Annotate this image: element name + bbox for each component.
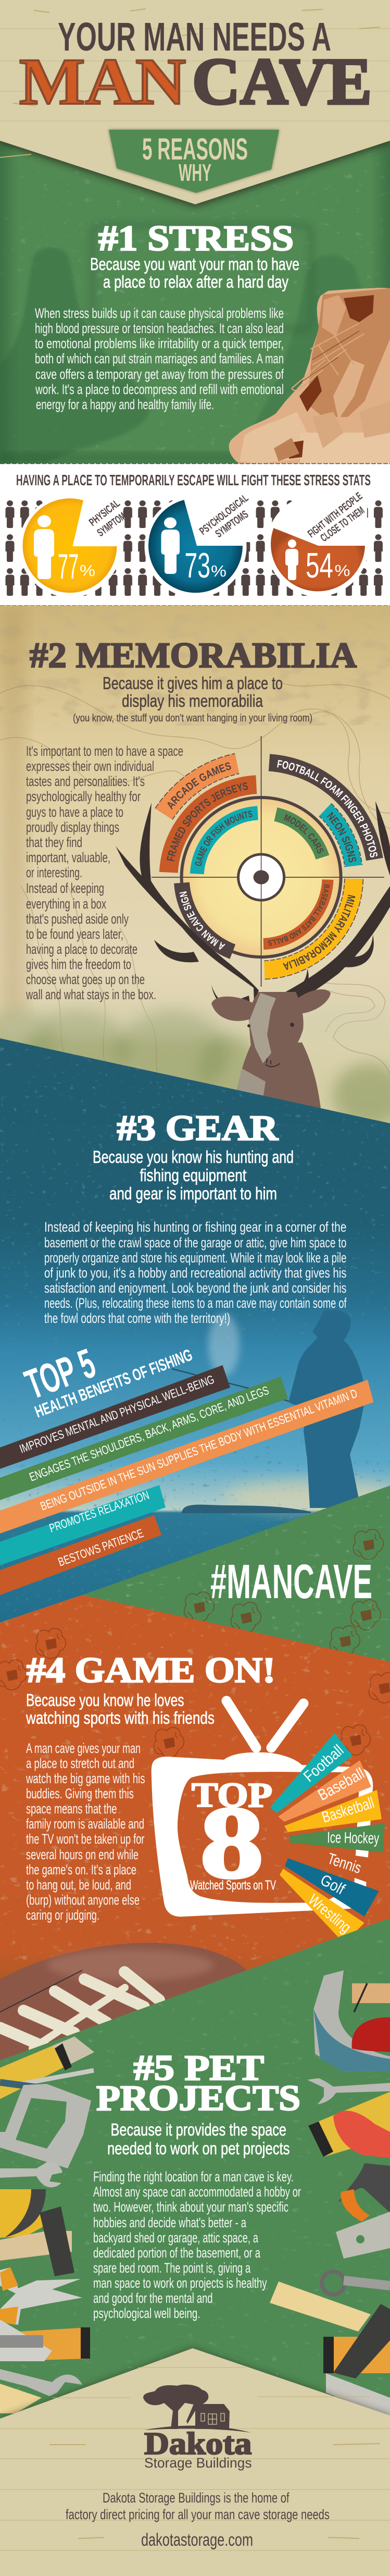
text block: pet projects body: and good for the mental and xyxy=(93,2290,212,2306)
subheading: stress reason: a place to relax after a hard day xyxy=(103,272,288,291)
heading: top 8: 8 xyxy=(200,1785,263,1899)
text block: game on body xyxy=(26,1740,145,1923)
icon: tv outline and antennas xyxy=(152,1701,373,1917)
deer neck xyxy=(237,1042,321,1108)
chart: top 8 watched sports tv xyxy=(152,1701,385,1943)
panel: stress stats band xyxy=(0,463,390,606)
heading: top 8 xyxy=(190,1776,276,1899)
panel: cream header with chevron xyxy=(0,0,390,207)
text block: pet projects body xyxy=(93,2169,301,2321)
subheading: gear reason: fishing equipment xyxy=(140,1166,246,1185)
icon: deer mount with antlers xyxy=(116,801,390,1108)
band: bestows patience: BESTOWS PATIENCE xyxy=(56,1526,145,1569)
arc: arcade games xyxy=(155,753,240,820)
subheading: memorabilia reason: display his memorabilia xyxy=(122,691,263,710)
text block: stress body: high blood pressure or tension headaches. It can also lead xyxy=(35,321,284,336)
text block: stress body xyxy=(35,305,284,412)
text block: pet projects body: psychological well being. xyxy=(93,2305,200,2321)
chart: 77 percent physical symptoms: PHYSICAL xyxy=(87,497,122,529)
ray: wrestling xyxy=(280,1869,364,1943)
chart: 77 percent physical symptoms: 77 xyxy=(58,547,79,586)
text block: stress body: energy for a happy and healthy family life. xyxy=(36,397,214,412)
ray: baseball xyxy=(278,1760,371,1822)
ray: tennis xyxy=(286,1846,385,1886)
text block: pet projects body: two. However, think about your man's specific xyxy=(93,2199,288,2215)
heading: #5 pet projects xyxy=(96,2048,300,2118)
text block: pet projects body: backyard shed or garage, attic space, a xyxy=(93,2230,259,2246)
icon: football xyxy=(0,1943,247,2060)
deer ears xyxy=(211,997,254,1021)
text block: game on body: a place to stretch out and xyxy=(26,1756,134,1771)
text block: game on body: (burp) without anyone else xyxy=(26,1892,140,1908)
panel: gear section sky and water xyxy=(0,1037,390,1663)
arc: model cars: MODEL CARS xyxy=(283,814,324,854)
text block: memorabilia body: psychologically healthy for xyxy=(26,789,141,804)
arc: arcade games: ARCADE GAMES xyxy=(168,762,231,810)
text block: memorabilia body: wall and what stays in the box. xyxy=(26,987,156,1002)
tool: level and saw lower left xyxy=(0,2320,90,2361)
chart: target of memorabilia items xyxy=(152,736,384,987)
heading: top 8: TOP xyxy=(192,1776,272,1814)
ray: golf: Golf xyxy=(318,1871,348,1898)
text block: memorabilia body: important, valuable, xyxy=(26,850,110,865)
tool: wrench and ruler bottom left xyxy=(0,2369,82,2413)
arc: football foam finger photos: FOOTBALL FOAM FINGER PHOTOS xyxy=(277,760,378,857)
text block: pet projects body: Finding the right location for a man cave is key. xyxy=(93,2169,294,2185)
text block: pet projects body: spare bed room. The point is, giving a xyxy=(93,2260,251,2276)
tool: ruler right xyxy=(270,2281,371,2332)
tool: drill and saw right xyxy=(336,2163,390,2259)
arc: model cars xyxy=(274,807,329,860)
ray: baseball: Baseball xyxy=(315,1765,367,1804)
subheading: gear reason: and gear is important to him xyxy=(109,1184,277,1203)
text block: game on body: A man cave gives your man xyxy=(26,1740,141,1756)
text block: memorabilia body: gives him the freedom to xyxy=(26,956,131,972)
chart: 73 percent psychological symptoms: PSYCHOLOGICAL xyxy=(197,492,250,537)
ray: tennis: Tennis xyxy=(325,1850,363,1877)
tool: level upper left xyxy=(0,2037,94,2099)
icon: football laces xyxy=(0,1972,159,2048)
subheading: game on reason xyxy=(26,1690,215,1727)
chart: 54 percent fight with people close to them: 54 xyxy=(306,546,333,585)
text block: stress body: both of which can put strain marriages and families. A man xyxy=(35,351,284,366)
subheading: memorabilia reason xyxy=(73,673,312,724)
band: bestows patience xyxy=(0,1515,161,1595)
banner: 5 reasons why: 5 REASONS xyxy=(142,132,248,166)
logo wordmark: Storage Buildings xyxy=(144,2455,252,2471)
heading: top 5 xyxy=(19,1340,195,1421)
text block: stress body: When stress builds up it can cause physical problems like xyxy=(35,305,284,321)
tool: level and pliers right xyxy=(308,2092,390,2158)
text block: game on body: space means that the xyxy=(26,1801,117,1817)
text block: game on body: the game's on. It's a place xyxy=(26,1862,136,1878)
text block: gear body: the fowl odors that come with the territory!) xyxy=(44,1310,230,1326)
text block: gear body xyxy=(44,1219,347,1326)
link text: dakotastorage.com: dakotastorage.com xyxy=(141,2530,253,2550)
arc: neon signs xyxy=(319,803,362,867)
text block: memorabilia body: Instead of keeping xyxy=(26,880,104,896)
logo house xyxy=(144,2404,251,2433)
text block: stress body: to emotional problems like irritability or a quick temper, xyxy=(35,336,284,351)
subheading: pet projects reason xyxy=(107,2120,290,2158)
subheading: stress reason: Because you want your man to have xyxy=(90,254,299,274)
text block: memorabilia body: everything in a box xyxy=(26,896,106,912)
text block: pet projects body: dedicated portion of the basement, or a xyxy=(93,2245,261,2261)
arc: military memorabilia: MILITARY MEMORABILIA xyxy=(283,894,355,970)
title: man cave xyxy=(19,45,372,118)
logo tree xyxy=(143,2385,208,2429)
heading: #3 gear: #3 GEAR xyxy=(117,1108,279,1148)
arc: neon signs: NEON SIGNS xyxy=(327,812,356,863)
heading: #4 game on: #4 GAME ON! xyxy=(27,1650,275,1690)
subheading: pet projects reason: Because it provides the space xyxy=(110,2120,286,2139)
text block: stress body: cave offers a temporary get away from the pressures of xyxy=(35,366,284,382)
heading: #1 stress: #1 STRESS xyxy=(98,218,294,258)
arc: military memorabilia xyxy=(264,879,363,992)
logo: dakota storage buildings xyxy=(143,2385,252,2471)
text block: game on body: several hours on end while xyxy=(26,1847,139,1862)
chart: 54 percent fight with people close to them: % xyxy=(334,561,350,580)
subheading: gear reason xyxy=(93,1147,294,1203)
text block: pet projects body: man space to work on projects is healthy xyxy=(93,2275,267,2291)
text block: footer description: Dakota Storage Buildings is the home of xyxy=(103,2490,290,2506)
heading: top 5: HEALTH BENEFITS OF FISHING xyxy=(32,1345,195,1421)
logo wordmark: Dakota xyxy=(144,2426,252,2461)
banner: 5 reasons why xyxy=(109,130,279,193)
title: man cave: MAN xyxy=(19,45,186,118)
chart: 77 percent physical symptoms xyxy=(19,495,132,597)
banner: 5 reasons why: WHY xyxy=(179,159,211,186)
panel: green hashtag triangle xyxy=(78,1486,390,1663)
chart: 73 percent psychological symptoms: % xyxy=(211,562,227,580)
tool: hammer, level and saw lower right xyxy=(323,2304,390,2419)
arc: a man cave sign: A MAN CAVE SIGN xyxy=(179,891,225,950)
text block: memorabilia body xyxy=(26,743,183,1002)
heading: #2 memorabilia: #2 MEMORABILIA xyxy=(30,635,357,675)
text block: stress body: work. It's a place to decompress and refill with emotional xyxy=(35,382,284,397)
band: engages shoulders: ENGAGES THE SHOULDERS, BACK, ARMS, CORE, AND LEGS xyxy=(28,1383,271,1484)
band: promotes relaxation xyxy=(0,1485,166,1565)
title: man cave: CAVE xyxy=(192,45,372,118)
tool: pliers left xyxy=(0,2267,82,2325)
text block: memorabilia body: guys to have a place to xyxy=(26,804,123,820)
ray: football xyxy=(270,1733,353,1813)
text block: memorabilia body: It's important to men to have a space xyxy=(26,743,183,759)
icon: hand tools around section xyxy=(0,1970,390,2419)
text block: memorabilia body: expresses their own individual xyxy=(26,758,154,774)
tool: wrench lower left xyxy=(0,2162,62,2187)
panel: memorabilia topographic map background xyxy=(0,606,390,1127)
subheading: pet projects reason: needed to work on pet projects xyxy=(107,2139,290,2158)
band: promotes relaxation: PROMOTES RELAXATION xyxy=(47,1488,151,1535)
text block: footer description xyxy=(66,2490,330,2522)
ray: football: Football xyxy=(300,1741,347,1785)
arc: baseball bats and balls: BASEBALL BATS AND BALLS xyxy=(268,884,330,946)
tool: wrench upper right xyxy=(307,2078,390,2104)
tool: grey handle saw left xyxy=(0,2084,91,2168)
chart: crowd of people icons xyxy=(3,500,385,596)
text block: game on body: caring or judging. xyxy=(26,1907,99,1923)
arc: framed sports jerseys: FRAMED SPORTS JERSEYS xyxy=(167,782,248,862)
panel: pet projects green section xyxy=(0,1918,390,2450)
subheading: game on reason: Because you know he loves xyxy=(26,1690,184,1710)
chart: 77 percent physical symptoms: SYMPTOMS xyxy=(95,508,132,539)
target rings and crosshair xyxy=(152,736,384,987)
tool: ring wrench right xyxy=(322,2272,390,2295)
text block: memorabilia body: that's pushed aside only xyxy=(26,911,129,927)
ray: basketball xyxy=(284,1790,382,1832)
list: top 5 health benefits of fishing xyxy=(0,1340,374,1595)
text block: memorabilia body: choose what goes up on the xyxy=(26,972,145,987)
ray: ice hockey xyxy=(290,1823,385,1853)
chart: 54 percent fight with people close to them xyxy=(267,490,369,596)
ray: golf xyxy=(285,1858,379,1917)
chart: 73 percent psychological symptoms: 73 xyxy=(184,546,210,585)
icon: worn tan boot xyxy=(229,288,390,463)
subheading: gear reason: Because you know his hunting and xyxy=(93,1147,294,1167)
panel: reason 1 stress green background xyxy=(0,133,390,463)
band: improves mental xyxy=(0,1365,230,1469)
ray: wrestling: Wrestling xyxy=(305,1891,354,1936)
heading: top 5: TOP 5 xyxy=(19,1340,101,1408)
subheading: stress reason xyxy=(90,254,299,291)
text block: game on body: watch the big game with his xyxy=(26,1771,145,1786)
text block: game on body: family room is available and xyxy=(26,1816,144,1832)
subheading: memorabilia reason: (you know, the stuff you don't want hanging in your living room) xyxy=(73,713,312,724)
text block: game on body: the TV won't be taken up for xyxy=(26,1831,145,1847)
chart: 73 percent psychological symptoms: SYMPTOMS xyxy=(213,508,250,540)
deer antlers xyxy=(116,801,390,1009)
heading: #5 pet projects: #5 PET xyxy=(133,2048,264,2088)
subheading: game on reason: watching sports with his friends xyxy=(26,1708,215,1727)
band: being outside xyxy=(0,1380,374,1534)
arc: game or fish mounts: GAME OR FISH MOUNTS xyxy=(195,811,252,866)
icon: fisherman silhouette and rod xyxy=(172,1310,366,1508)
text block: memorabilia body: or interesting. xyxy=(26,865,82,880)
band: improves mental: IMPROVES MENTAL AND PHYSICAL WELL-BEING xyxy=(18,1372,216,1456)
text block: memorabilia body: proudly display things xyxy=(26,819,119,835)
heading: top 8: Watched Sports on TV xyxy=(190,1878,276,1893)
text block: game on body: to hang out, be loud, and xyxy=(26,1877,131,1893)
chart: 77 percent physical symptoms: % xyxy=(80,561,95,580)
band: engages shoulders xyxy=(0,1377,288,1500)
text block: memorabilia body: that they find xyxy=(26,835,82,850)
text block: game on body: buddies. Giving them this xyxy=(26,1786,134,1801)
text block: memorabilia body: tastes and personalities. It's xyxy=(26,774,145,789)
panel: game on orange section xyxy=(0,1595,390,2064)
subheading: memorabilia reason: Because it gives him a place to xyxy=(103,673,283,693)
deer head xyxy=(249,992,304,1046)
text block: memorabilia body: having a place to decorate xyxy=(26,941,137,957)
tool: clamp with teal handle xyxy=(313,1970,390,2072)
text block: pet projects body: hobbies and decide what's better - a xyxy=(93,2215,247,2230)
chart: 73 percent psychological symptoms xyxy=(145,492,251,597)
tool: drill and hammer left xyxy=(0,2189,74,2276)
panel: cream footer xyxy=(0,2348,390,2576)
heading: #5 pet projects: PROJECTS xyxy=(96,2078,300,2118)
text block: memorabilia body: to be found years later, xyxy=(26,926,123,942)
